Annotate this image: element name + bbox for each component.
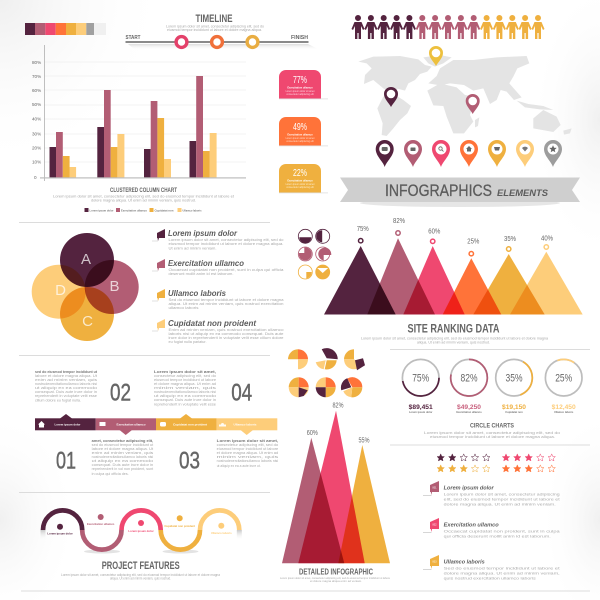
circle B bbox=[85, 260, 139, 314]
circle chart 82% bbox=[451, 359, 487, 414]
circle charts description: eiusmod tempor incididunt ut labore et dolore magna aliqua. bbox=[430, 435, 555, 439]
venn letters: A bbox=[81, 251, 91, 268]
step text 01 block: sed do eiusmod tempor incididunt ut bbox=[92, 443, 153, 447]
pie 5 bbox=[316, 377, 336, 397]
wave segments bbox=[43, 510, 239, 550]
people row bbox=[352, 15, 544, 39]
venn list item D bbox=[152, 318, 284, 344]
bottom list item 1: dolore magna aliqua. Ut enim ad minim veniam. bbox=[444, 502, 556, 506]
flag 1: 001 bbox=[432, 486, 437, 490]
number 02: 02 bbox=[110, 380, 131, 406]
stat card 22%: Lorem ipsum dolor sit amet bbox=[286, 183, 315, 186]
step text 03 block: nostrudexercitationullamco laboris nisi bbox=[217, 459, 278, 463]
step text 02 block: reprehenderit in voluptate velit esse bbox=[35, 394, 97, 398]
stat card 22%: consectetur adipiscing elit bbox=[286, 186, 314, 189]
axis labels: 30% bbox=[32, 132, 41, 136]
site ranking description: aliqua. Ut enim ad minim veniam, quis nostrud. bbox=[417, 340, 490, 344]
map pin rose bbox=[466, 94, 480, 114]
feature 1: Lorem ipsum dolor bbox=[47, 532, 74, 536]
triangle 55% bbox=[338, 445, 390, 563]
pie 1 bbox=[288, 349, 308, 369]
ranking percent labels: 40% bbox=[541, 234, 553, 242]
bars group 3 bbox=[144, 101, 171, 178]
bottom list item 2: Exercitation ullamco bbox=[444, 522, 499, 528]
number 03: 03 bbox=[179, 448, 200, 474]
amber stars bbox=[437, 465, 490, 472]
step text 04 block bbox=[154, 370, 216, 406]
stat card 49% bbox=[279, 117, 328, 146]
venn list item A: eiusmod tempor incididunt ut labore et dolore magna aliqua. bbox=[168, 242, 284, 246]
site ranking description: Lorem ipsum dolor sit amet, consectetur adipiscing elit, sed do eiusmod tempor incididunt ut labore et dolore magna bbox=[361, 336, 548, 340]
step text 04 block: nostrudexercitationullamco laboris nisi bbox=[154, 390, 216, 394]
feature 1 bbox=[47, 524, 74, 536]
stat card 49%: Lorem ipsum dolor sit amet bbox=[286, 137, 315, 140]
circle chart 35%: 35% bbox=[506, 372, 523, 384]
pie 3 bbox=[344, 349, 365, 370]
feature 5 bbox=[211, 523, 232, 535]
mail icon bbox=[100, 422, 106, 426]
circle chart 82%: Exercitation ullamco bbox=[456, 410, 482, 414]
venn letters: C bbox=[82, 313, 93, 330]
step text 04 block: minim veniam, quis bbox=[154, 386, 216, 390]
bars group 1 bbox=[50, 132, 76, 178]
numbered step text blocks bbox=[35, 370, 279, 476]
circle charts title: CIRCLE CHARTS bbox=[470, 422, 515, 430]
timeline description: Lorem ipsum dolor sit amet, consectetur adipiscing elit, sed do bbox=[166, 24, 264, 28]
bottom list item 1: elit, sed do eiusmod tempor incididunt ut labore et bbox=[444, 498, 560, 502]
step text 02 block: cillum dolore eu fugiat nulla. bbox=[35, 398, 81, 402]
chart description: dolore magna aliqua. Ut enim ad minim veniam, quis nostrud. bbox=[91, 198, 196, 202]
step text 01 block: enim ad minim veniam, quis bbox=[92, 451, 153, 455]
bottom list item 3 bbox=[423, 555, 560, 580]
venn letters: D bbox=[55, 282, 66, 299]
pin: cart bbox=[488, 140, 506, 167]
triangle 82% bbox=[367, 238, 435, 314]
venn diagram bbox=[32, 233, 139, 341]
circle chart 25%: 25% bbox=[555, 372, 572, 384]
venn list item D: irure dolor in reprehenderit in voluptate velit esse cillum dolore bbox=[168, 336, 284, 340]
grid lines and axes bbox=[44, 45, 246, 181]
pin: wifi bbox=[516, 140, 534, 167]
bars group 4 bbox=[190, 76, 217, 178]
bottom list item 3: quis nostrud exercitation ullamco laboris bbox=[444, 576, 536, 580]
feature 4 bbox=[164, 515, 195, 528]
wedge pie amber bbox=[316, 265, 330, 279]
circle chart 35%: Cupidatat non bbox=[505, 410, 523, 414]
circle chart 25%: $12,450 bbox=[552, 404, 576, 411]
feature 4: Cupidatat non proident bbox=[164, 524, 195, 528]
bars group 2 bbox=[97, 90, 124, 178]
step text 02 block: labore et dolore magna aliqua. Ut bbox=[35, 374, 97, 378]
step text 01 block: reprehenderit in vol non proident, sunt bbox=[92, 467, 153, 471]
flag D bbox=[152, 319, 165, 331]
circle charts description: Lorem ipsum dolor sit amet, consectetur adipiscing elit, sed do bbox=[424, 431, 560, 435]
triangle 25% bbox=[443, 258, 501, 314]
chart description bbox=[53, 194, 234, 202]
step bar: Cupidatat non proident bbox=[173, 422, 207, 426]
step text 02 block bbox=[35, 370, 98, 402]
stat card 49%: consectetur adipiscing elit bbox=[286, 140, 314, 143]
ribbon banner bbox=[340, 178, 580, 207]
bottom list item 1 bbox=[423, 481, 560, 506]
step text 03 block: Lorem ipsum dolor sit amet, bbox=[217, 439, 278, 443]
circle charts description bbox=[424, 431, 560, 439]
step text 04 block: eiusmod tempor incididunt ut labore bbox=[154, 378, 216, 382]
timeline shadow bbox=[128, 44, 320, 50]
step text 02 block: nostrudexercitationullamco laboris nisi bbox=[35, 382, 97, 386]
flag 2: 002 bbox=[432, 524, 437, 526]
step text 01 block: amet, consectetur adipiscing elit, bbox=[92, 439, 153, 443]
star ratings bbox=[437, 454, 555, 472]
chart title: CLUSTERED COLUMN CHART bbox=[110, 188, 177, 194]
step bar: Exercitation ullamco bbox=[116, 422, 146, 426]
triangle 40% bbox=[510, 252, 583, 314]
chart legend: Lorem ipsum dolor bbox=[90, 208, 114, 212]
step bar: Ullamco laboris bbox=[234, 422, 257, 426]
step bar: Lorem ipsum dolor bbox=[54, 422, 81, 426]
detailed infographic title: DETAILED INFOGRAPHIC bbox=[299, 568, 373, 576]
project features description: aliqua. Ut enim ad minim veniam, quis nostrud. bbox=[110, 576, 171, 580]
chart legend: Ullamco laboris bbox=[182, 208, 202, 212]
bottom list item 2 bbox=[423, 518, 560, 538]
map pin yellow bbox=[429, 46, 443, 66]
banner subheading: ELEMENTS bbox=[497, 188, 548, 198]
step text 03 block: ut aliquip ex ea a aute irure ut. bbox=[217, 464, 261, 468]
detailed percent labels: 55% bbox=[358, 438, 370, 444]
step text 03 block: consectetur adipiscing elit, sed do bbox=[217, 443, 278, 447]
circle D bbox=[32, 265, 86, 319]
site ranking description bbox=[361, 336, 548, 344]
step text 04 block: reprehenderit in voluptate velit esse bbox=[154, 402, 216, 406]
venn list item A: Lorem ipsum dolor sit amet, consectetur adipiscing elit, sed do bbox=[168, 238, 284, 242]
feature 3 bbox=[128, 520, 155, 533]
quarter pie amber bbox=[298, 265, 312, 279]
stat card 77%: Exercitation ullamco bbox=[287, 86, 313, 90]
venn list item C bbox=[152, 288, 284, 310]
step text 01 block: nostrudexercitationullamco laboris nisi bbox=[92, 455, 153, 459]
venn list item B: Exercitation ullamco bbox=[168, 258, 244, 268]
stat card 77%: Lorem ipsum dolor sit amet bbox=[286, 90, 315, 93]
start label: START bbox=[126, 35, 140, 41]
ranking markers bbox=[358, 231, 548, 256]
axis labels: 10% bbox=[32, 160, 41, 164]
venn list item C: ullamco laboris bbox=[168, 306, 199, 310]
circle chart 75% bbox=[402, 359, 439, 414]
site ranking title: SITE RANKING DATA bbox=[408, 322, 500, 336]
stat card 77%: consectetur adipiscing elit bbox=[286, 93, 314, 96]
circle chart 35%: $19,150 bbox=[502, 404, 526, 411]
step text 04 block: consectetur adipiscing elit, sed do bbox=[154, 374, 216, 378]
project features wave bbox=[40, 510, 242, 580]
step text 03 block: eiusmod tempor incididunt ut labore bbox=[217, 447, 278, 451]
bottom list item 1: Lorem ipsum dolor bbox=[444, 486, 495, 492]
step text 04 block: et dolore magna aliqua. Ut enim ad bbox=[154, 382, 216, 386]
venn list item A: Lorem ipsum dolor bbox=[168, 228, 238, 238]
bottom list item 1: Lorem ipsum dolor sit amet, consectetur adipiscing bbox=[444, 492, 560, 496]
people icon bbox=[219, 423, 226, 426]
circle C bbox=[60, 287, 114, 341]
ranking percent labels: 25% bbox=[467, 236, 480, 246]
pie 6 bbox=[341, 377, 362, 397]
world map bbox=[358, 55, 572, 136]
project features description bbox=[61, 573, 220, 580]
flag A bbox=[152, 229, 165, 241]
step text 02 block: consequat. Duis aute irure dolor in bbox=[35, 390, 97, 394]
detailed infographic description: Lorem ipsum dolor sit amet, consectetur adipiscing elit, sed do eiusmod tempor incididunt ut labore bbox=[280, 576, 390, 580]
ranking percent labels: 75% bbox=[357, 224, 369, 233]
venn list item B: Occaecat cupidatat non proident, sunt in culpa qui officia bbox=[168, 268, 284, 272]
circle chart 35% bbox=[496, 359, 532, 414]
timeline description bbox=[166, 24, 264, 32]
step bar bbox=[35, 414, 277, 435]
colour palette bbox=[25, 23, 106, 35]
axis labels: 0 bbox=[34, 175, 37, 180]
clustered column chart bbox=[32, 45, 246, 212]
chart legend: Cupidatat non bbox=[154, 208, 174, 212]
home icon bbox=[38, 421, 45, 428]
venn letters bbox=[55, 251, 120, 330]
axis labels: 50% bbox=[32, 102, 41, 107]
triangle 60% bbox=[282, 438, 344, 563]
milestone 2 bbox=[212, 37, 222, 47]
axis labels: 60% bbox=[32, 88, 41, 93]
ranking percent labels: 35% bbox=[504, 234, 516, 243]
step text 01 block: in culpa qui officia des. bbox=[92, 472, 129, 476]
venn list item C: Sed do eiusmod tempor incididunt ut labore et dolore magna bbox=[168, 298, 284, 302]
step text 02 block: sed do eiusmod tempor incididunt ut bbox=[35, 370, 98, 374]
detailed infographic description bbox=[280, 576, 390, 583]
triangle 60% bbox=[403, 246, 465, 314]
timeline description: eiusmod tempor incididunt ut labore et dolore magna aliqua. bbox=[167, 28, 262, 32]
ranking percent labels: 82% bbox=[393, 216, 405, 225]
milestone 1 bbox=[176, 37, 187, 47]
step text 01 block: consequat. Duis aute irure dolor in bbox=[92, 463, 153, 467]
pie 4 bbox=[289, 377, 309, 397]
pin: mail bbox=[404, 140, 422, 167]
icon pins row bbox=[376, 140, 562, 167]
feature 5: Ullamco laboris bbox=[211, 531, 232, 535]
venn list item D: Cupidatat non proident bbox=[168, 318, 257, 328]
orange pie charts bbox=[288, 348, 365, 397]
step text 04 block: ut aliquip ex ea commodo bbox=[154, 394, 216, 398]
triangle 75% bbox=[324, 246, 396, 314]
step text 01 block: ut aliquip ex ea commodo bbox=[92, 459, 153, 463]
detailed percent labels bbox=[307, 402, 370, 444]
detailed infographic triangles bbox=[282, 411, 390, 563]
venn list item D: eu fugiat nulla pariatur. bbox=[168, 340, 206, 344]
step text 03 block bbox=[217, 439, 279, 468]
axis labels: 40% bbox=[32, 116, 41, 122]
wave shadows bbox=[40, 530, 242, 554]
timeline bbox=[126, 13, 320, 50]
detailed infographic description: et dolore magna aliqua enim ad veniam. bbox=[310, 579, 362, 583]
stat card 77%: 77% bbox=[293, 75, 307, 86]
number 01: 01 bbox=[56, 448, 76, 474]
axis labels: 70% bbox=[32, 74, 41, 79]
timeline title: TIMELINE bbox=[196, 13, 232, 25]
circle chart 25% bbox=[545, 359, 582, 414]
purple stars bbox=[437, 454, 490, 461]
venn list item D: laboris nisi ut aliquip ex ea commodo consequat. Duis aute bbox=[168, 332, 284, 336]
half pie purple horizontal bbox=[298, 229, 312, 243]
ranking percent labels: 60% bbox=[428, 226, 441, 236]
project features title: PROJECT FEATURES bbox=[102, 560, 180, 572]
circle chart 82%: $49,250 bbox=[457, 404, 481, 411]
three quarter pie rose 2 bbox=[316, 247, 331, 261]
flag C bbox=[152, 289, 165, 301]
step text 04 block: consequat. Duis aute irure dolor in bbox=[154, 398, 216, 402]
step text 03 block: et dolore magna aliqua. Ut enim ad bbox=[217, 451, 278, 455]
bottom list item 2: Occaecat cupidatat non proident, sunt in culpa bbox=[444, 530, 560, 534]
finish label: FINISH bbox=[291, 35, 308, 41]
pie 2 bbox=[316, 348, 338, 370]
three quarter pie rose 1 bbox=[298, 247, 312, 261]
flag B bbox=[152, 259, 165, 271]
bottom list item 3: Sed do eiusmod tempor incididunt ut labore et bbox=[444, 566, 560, 570]
step text 01 block: labore et dolore magna aliqua. Ut bbox=[92, 447, 153, 451]
venn list item A: Ut enim ad minim veniam. bbox=[168, 246, 216, 250]
step text 01 block bbox=[92, 439, 153, 476]
detailed percent labels: 60% bbox=[307, 430, 318, 437]
circle chart 25%: Ullamco laboris bbox=[554, 410, 574, 414]
chart description: Lorem ipsum dolor sit amet, consectetur adipiscing elit, sed do eiusmod tempor incididunt ut labore et bbox=[53, 194, 234, 198]
chart legend: Exercitation ullamco bbox=[121, 208, 147, 212]
step text 04 block: Lorem ipsum dolor sit amet, bbox=[154, 370, 216, 374]
burger icon bbox=[160, 422, 166, 426]
feature 3: Lorem ipsum dolor bbox=[128, 529, 155, 533]
orange stars bbox=[502, 465, 555, 472]
feature 2: Exercitation ullamco bbox=[87, 522, 115, 526]
axis labels bbox=[32, 60, 41, 180]
step text 03 block: minim veniam, quis bbox=[217, 455, 279, 459]
axis labels: 80% bbox=[32, 60, 41, 65]
project features description: Lorem ipsum dolor sit amet, consectetur adipiscing elit, sed do eiusmod tempor incididunt ut labore et dolore magna bbox=[61, 573, 220, 577]
pin: home bbox=[460, 140, 478, 167]
milestone 3 bbox=[247, 37, 258, 47]
venn list item C: Ullamco laboris bbox=[168, 288, 226, 298]
venn list item B bbox=[152, 258, 284, 276]
venn list item D: Enim ad minim veniam, quis nostrud exercitation ullamco bbox=[168, 328, 284, 332]
pin: star bbox=[544, 140, 562, 167]
pin: search bbox=[432, 140, 450, 167]
half pie purple vertical bbox=[316, 229, 330, 243]
circle chart 82%: 82% bbox=[460, 372, 478, 384]
stat card 22% bbox=[279, 164, 328, 193]
small pie icons bbox=[298, 229, 331, 279]
axis labels: 20% bbox=[32, 146, 41, 150]
timeline bar bbox=[126, 41, 308, 43]
flag 3: 003 bbox=[432, 560, 437, 564]
feature 2 bbox=[87, 514, 115, 526]
venn list item C: aliqua. Ut enim ad minim veniam, quis nostrud exercitation bbox=[168, 302, 284, 306]
venn list item B: deserunt mollit anim id est laborum. bbox=[168, 272, 234, 276]
detailed percent labels: 82% bbox=[332, 402, 344, 410]
circle chart 75%: Lorem ipsum dolor bbox=[409, 410, 432, 414]
venn list item A bbox=[152, 228, 284, 250]
number 04: 04 bbox=[231, 380, 252, 406]
baseline bbox=[40, 177, 246, 178]
circle chart 75%: $89,451 bbox=[409, 404, 433, 411]
pin: people bbox=[376, 140, 394, 167]
triangle 35% bbox=[473, 254, 545, 314]
site ranking triangles bbox=[324, 238, 583, 314]
stat card 49%: Exercitation ullamco bbox=[287, 132, 313, 136]
banner heading: INFOGRAPHICS bbox=[385, 181, 492, 200]
bottom list item 2: qui officia deserunt mollit anim id est laborum. bbox=[444, 534, 551, 538]
stat card 77% bbox=[279, 70, 328, 99]
stat card 49%: 49% bbox=[293, 122, 307, 133]
pink stars bbox=[502, 454, 555, 461]
step text 02 block: ut aliquip ex ea commodo bbox=[35, 386, 97, 390]
stat card 22%: Exercitation ullamco bbox=[287, 178, 313, 182]
ranking percent labels bbox=[357, 216, 553, 246]
bottom list item 3: Ullamco laboris bbox=[444, 560, 485, 566]
stat card 22%: 22% bbox=[293, 168, 307, 179]
bottom list item 3: dolore magna aliqua. Ut enim ad minim veniam, bbox=[444, 572, 560, 576]
circle chart 75%: 75% bbox=[412, 372, 429, 384]
chart legend bbox=[84, 208, 202, 212]
circle A bbox=[60, 233, 114, 287]
map pin purple bbox=[384, 87, 398, 107]
venn letters: B bbox=[109, 278, 120, 295]
step text 02 block: enim ad minim veniam, quis bbox=[35, 378, 97, 382]
triangle 82% bbox=[298, 411, 365, 563]
